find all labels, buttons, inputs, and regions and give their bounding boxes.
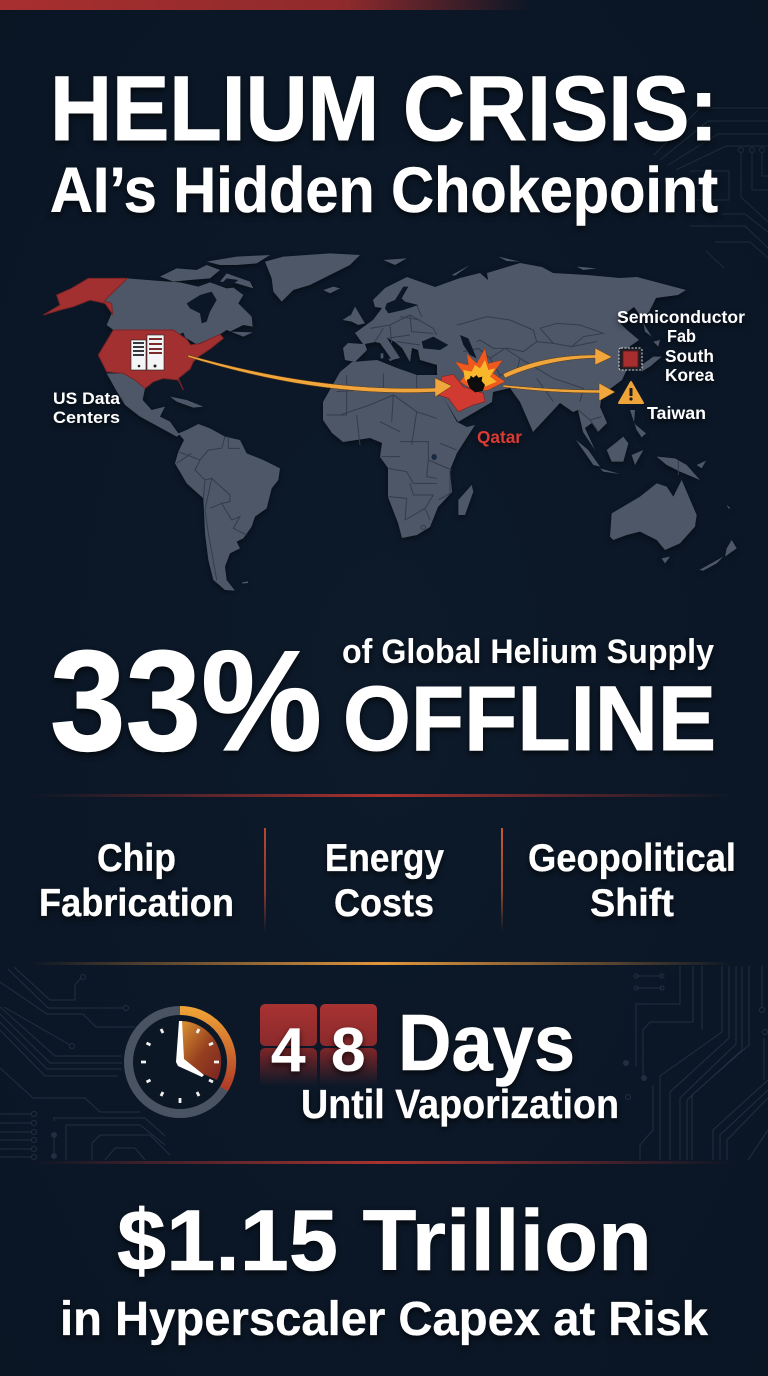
icon: servers <box>131 335 164 370</box>
Africa <box>323 360 475 538</box>
highlighted USA and Alaska <box>43 278 223 390</box>
Eurasia <box>343 263 686 450</box>
title <box>50 58 718 226</box>
label: Semiconductor Fab South Korea: Korea <box>665 365 714 385</box>
column: energy costs: Energy <box>325 837 444 880</box>
column: chip fabrication: Fabrication <box>39 882 234 925</box>
label: Semiconductor Fab South Korea: South <box>665 346 714 366</box>
highlighted Arabian peninsula <box>438 374 485 412</box>
countdown tiles <box>260 1004 377 1086</box>
land masses <box>104 253 737 591</box>
title line 2: AI’s Hidden Chokepoint <box>50 154 718 226</box>
column: chip fabrication: Chip <box>97 837 176 880</box>
impact columns <box>39 837 736 925</box>
arrow: Qatar to South Korea <box>503 348 612 378</box>
top accent bar <box>0 0 530 10</box>
label: Taiwan: Taiwan <box>647 403 706 423</box>
title line 1: HELIUM CRISIS: <box>50 58 718 160</box>
label: Semiconductor Fab South Korea: Semiconductor <box>617 307 745 327</box>
column: geopolitical shift: Shift <box>590 882 674 925</box>
arrow: Qatar to Taiwan <box>503 383 615 401</box>
icon: chip <box>619 348 642 370</box>
label: Semiconductor Fab South Korea <box>617 307 745 385</box>
circuit pattern: lower right <box>624 966 768 1160</box>
big number: 33% <box>50 622 322 781</box>
Japan <box>642 323 662 372</box>
column: energy costs <box>325 837 444 925</box>
icon: countdown clock <box>128 1010 232 1114</box>
label: US Data Centers: Centers <box>53 408 120 427</box>
capex caption: in Hyperscaler Capex at Risk <box>60 1293 708 1346</box>
world map <box>43 253 745 591</box>
country borders <box>177 305 678 580</box>
European islands <box>323 257 597 361</box>
inland seas <box>178 278 477 358</box>
Canada, Greenland, Arctic islands, Mexico, Caribbean <box>104 253 360 437</box>
column: energy costs: Costs <box>334 882 434 925</box>
icon: explosion <box>455 348 505 392</box>
divider <box>30 794 735 797</box>
offline word: OFFLINE <box>343 668 716 770</box>
supply caption: of Global Helium Supply <box>342 633 714 671</box>
column: geopolitical shift <box>528 837 736 925</box>
South America, Madagascar <box>175 424 473 591</box>
countdown tiles: 4 <box>271 1016 306 1085</box>
label: Semiconductor Fab South Korea: Fab <box>667 326 696 346</box>
until vaporization: Until Vaporization <box>301 1081 619 1127</box>
stat: 33% offline <box>50 622 716 781</box>
arrow: US to Qatar <box>188 355 452 397</box>
days label: Days <box>398 998 575 1087</box>
circuit pattern: lower left <box>0 967 170 1160</box>
capex figure: $1.15 Trillion <box>117 1193 652 1289</box>
column: chip fabrication <box>39 837 234 925</box>
Southeast Asia, Australia, New Zealand <box>576 410 737 571</box>
label: US Data Centers <box>53 389 121 427</box>
circuit pattern: top right <box>654 108 768 268</box>
icon: warning <box>619 382 643 403</box>
label: Qatar: Qatar <box>477 427 522 447</box>
column: geopolitical shift: Geopolitical <box>528 837 736 880</box>
label: US Data Centers: US Data <box>53 389 121 408</box>
countdown tiles: 8 <box>331 1016 365 1085</box>
